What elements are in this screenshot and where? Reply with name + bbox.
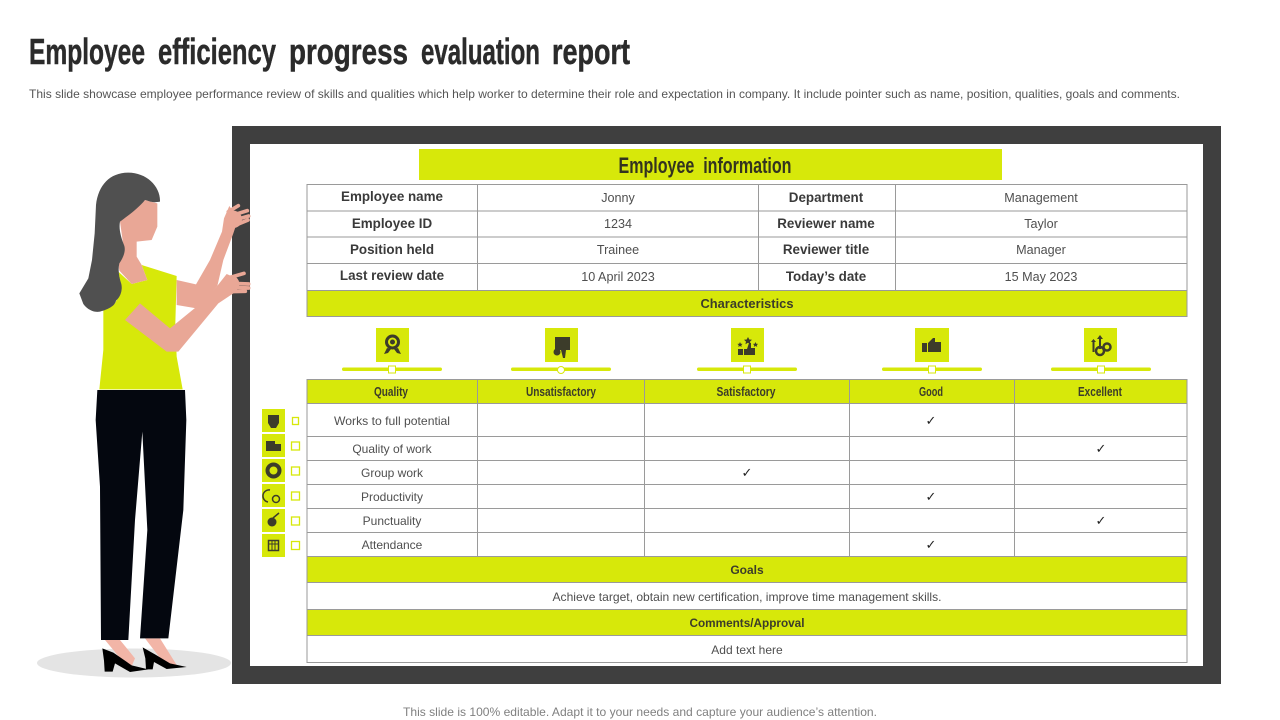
table: characteristics ratings: Group work (361, 466, 424, 480)
table: characteristics ratings: ✓ (1096, 514, 1106, 529)
icon: satisfactory (697, 328, 797, 373)
table: employee information: Trainee (597, 243, 639, 257)
table: characteristics ratings: Productivity (361, 490, 423, 504)
table: characteristics ratings: ✓ (1096, 442, 1106, 457)
icon: excellent gears and arrows (1051, 328, 1151, 373)
subtitle: This slide showcase employee performance review of skills and qualities which help worker to determine their role and expectation in company. It include pointer such as name, position, qualities, goals and comments. (29, 87, 1180, 101)
heading: characteristics: Characteristics (700, 296, 794, 311)
heading: goals: Goals (730, 563, 764, 577)
table: employee information: 15 May 2023 (1005, 270, 1077, 284)
table: employee information: Manager (1016, 243, 1066, 257)
table: employee information: Employee ID (352, 216, 433, 231)
text: goals content: Achieve target, obtain new certification, improve time management skills. (552, 590, 942, 604)
icon: good thumbs up (882, 328, 982, 373)
heading: employee information (419, 149, 1002, 180)
table: characteristics ratings: Satisfactory (716, 384, 776, 399)
table: employee information: Employee name (341, 189, 443, 204)
table: employee information: 1234 (604, 217, 632, 231)
table: employee information: Jonny (601, 191, 636, 205)
text: comments content (307, 636, 1187, 662)
table: characteristics ratings: Good (919, 384, 943, 399)
table: characteristics ratings: ✓ (926, 538, 936, 553)
table: characteristics ratings: ✓ (926, 414, 936, 429)
table: employee information: Taylor (1024, 217, 1058, 231)
table: characteristics ratings: Quality of work (352, 442, 433, 456)
icons: row indicators (262, 409, 300, 557)
table: characteristics ratings: Attendance (362, 538, 423, 552)
title (29, 31, 630, 72)
table: characteristics ratings: Excellent (1078, 384, 1123, 399)
table: characteristics ratings (307, 380, 1187, 556)
icon: quality rosette (342, 328, 442, 373)
heading: characteristics (307, 290, 1187, 316)
icon: unsatisfactory (511, 328, 611, 374)
text: goals content (307, 582, 1187, 610)
table: characteristics ratings: ✓ (926, 490, 936, 505)
table: employee information: Reviewer title (783, 242, 869, 257)
table: employee information (307, 184, 1187, 290)
heading: employee information: Employee information (618, 153, 792, 178)
panel: report board (232, 126, 1221, 684)
title: progress (289, 31, 408, 72)
title: report (552, 31, 630, 72)
table: employee information: 10 April 2023 (581, 270, 655, 284)
table: employee information: Last review date (340, 268, 444, 283)
table: employee information: Department (789, 190, 864, 205)
table: employee information: Today’s date (786, 269, 866, 284)
heading: comments and approval: Comments/Approval (690, 616, 804, 630)
text: comments content: Add text here (711, 643, 783, 657)
table: characteristics ratings: Punctuality (363, 514, 421, 528)
illustration: woman presenting (37, 173, 249, 678)
heading: comments and approval (307, 610, 1187, 636)
table: employee information: Management (1004, 191, 1078, 205)
title: efficiency (158, 31, 276, 72)
table: employee information: Position held (350, 242, 434, 257)
title: evaluation (421, 31, 540, 72)
table: characteristics ratings: Quality (374, 384, 409, 399)
title: Employee (29, 31, 145, 72)
heading: goals (307, 556, 1187, 582)
table: characteristics ratings: Unsatisfactory (526, 384, 597, 399)
table: characteristics ratings: Works to full potential (334, 414, 450, 428)
footer note: This slide is 100% editable. Adapt it to your needs and capture your audience’s attention. (403, 705, 877, 719)
table: employee information: Reviewer name (777, 216, 875, 231)
table: characteristics ratings: ✓ (742, 466, 752, 481)
